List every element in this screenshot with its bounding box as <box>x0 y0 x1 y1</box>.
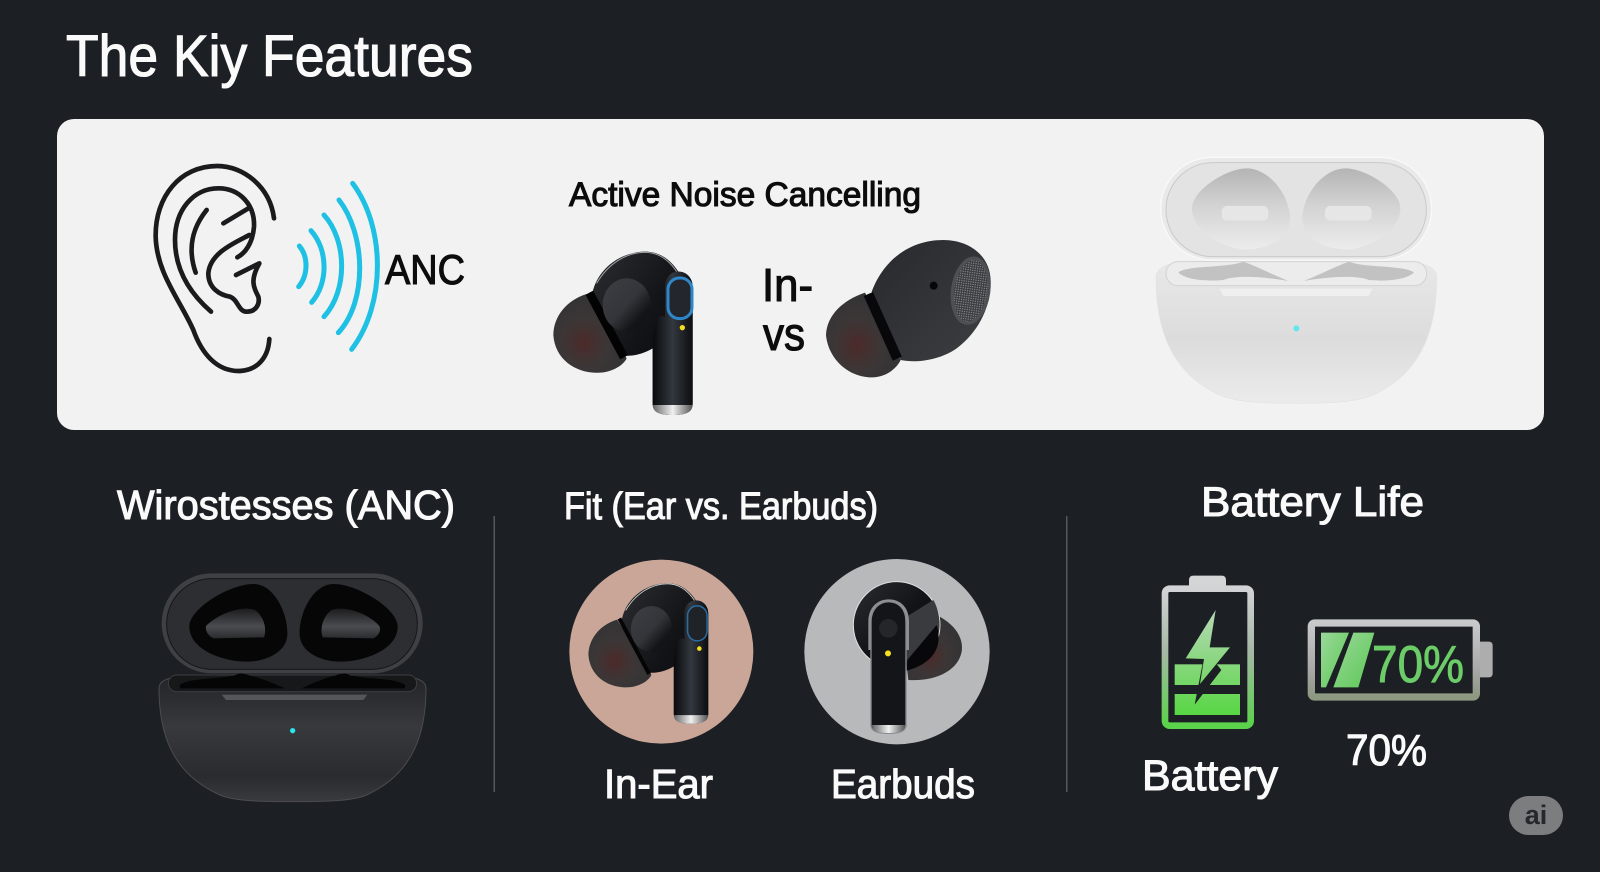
badge: ai: ai <box>1525 800 1547 830</box>
label: In- vs: In- <box>762 259 813 311</box>
icon: ear with sound waves <box>156 166 377 371</box>
icon: round earbud <box>826 240 993 377</box>
icon: horizontal battery at 70% <box>1311 623 1493 697</box>
icon: open white charging case <box>1156 157 1437 403</box>
heading: Wirostesses (ANC): Wirostesses (ANC) <box>117 482 455 528</box>
title: The Kiy Features <box>66 24 473 89</box>
label: In- vs: vs <box>763 308 805 360</box>
label: In- vs <box>762 259 813 360</box>
icon: stem earbud <box>553 252 693 415</box>
label: ANC: ANC <box>385 246 465 293</box>
divider line <box>494 516 495 792</box>
badge: ai <box>1509 796 1563 835</box>
icon: open black charging case <box>159 573 426 802</box>
heading: Active Noise Cancelling: Active Noise Cancelling <box>569 176 921 214</box>
label: 70%: 70% <box>1346 726 1427 775</box>
label: In-Ear: In-Ear <box>604 761 713 807</box>
icon: in-ear circle <box>569 560 753 744</box>
icon: earbuds circle <box>804 559 990 744</box>
label: Earbuds: Earbuds <box>831 761 975 807</box>
icon: vertical charging battery <box>1165 576 1251 726</box>
heading: Battery Life: Battery Life <box>1201 478 1424 525</box>
divider line <box>1066 516 1068 792</box>
text: 70% inside battery: 70% <box>1372 636 1464 694</box>
label: Battery: Battery <box>1142 752 1278 800</box>
panel: feature overview <box>57 119 1544 430</box>
heading: Fit (Ear vs. Earbuds): Fit (Ear vs. Earbuds) <box>564 486 878 528</box>
